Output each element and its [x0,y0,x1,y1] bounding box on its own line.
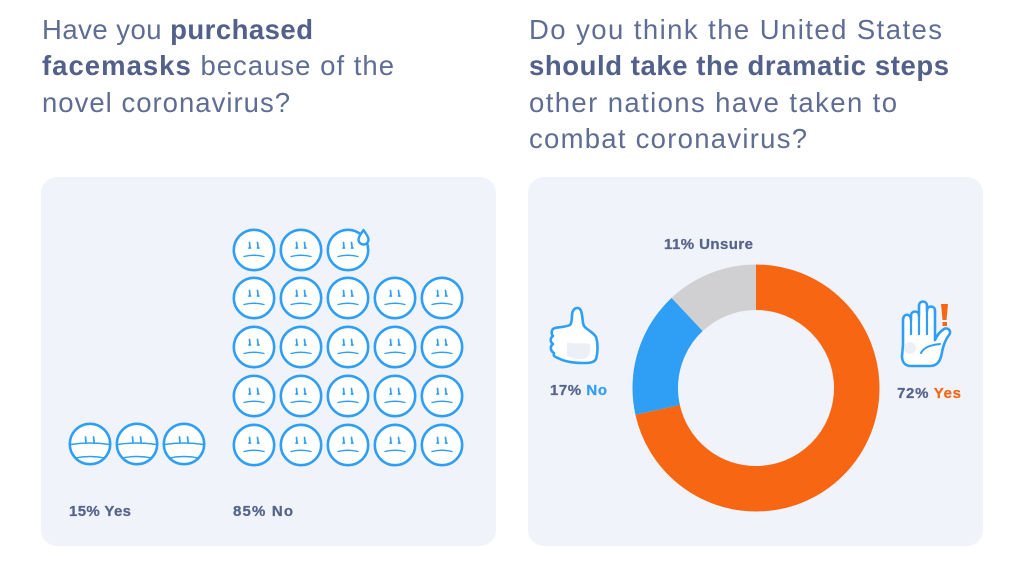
heading: dramatic steps question: should take the dramatic steps [529,50,949,81]
heading: facemasks question [42,14,394,118]
heading: dramatic steps question: other nations have taken to [529,87,897,118]
label: 85% no: 85% No [233,503,293,520]
heading: dramatic steps question: Do you think the United States [529,14,942,45]
heading: facemasks question: Have you purchased [42,14,313,45]
label: 17% no: 17% No [550,382,607,399]
heading: facemasks question: novel coronavirus? [42,87,290,118]
label: 72% yes: 72% Yes [897,385,961,402]
icon: raised hand with exclamation [902,302,950,366]
panel: dramatic steps [528,177,983,546]
heading: dramatic steps question: combat coronavirus? [529,123,807,154]
pictogram: 85% no unmasked faces [234,230,462,465]
pictogram: 15% yes masked faces [70,424,204,464]
panel: facemask purchases [41,177,496,546]
icon: thumbs up [551,308,598,363]
donut chart [655,287,857,489]
heading: facemasks question: facemasks because of the [42,50,394,81]
label: 11% unsure: 11% Unsure [664,236,753,253]
heading: dramatic steps question [529,14,949,154]
label: 15% yes: 15% Yes [69,503,131,520]
